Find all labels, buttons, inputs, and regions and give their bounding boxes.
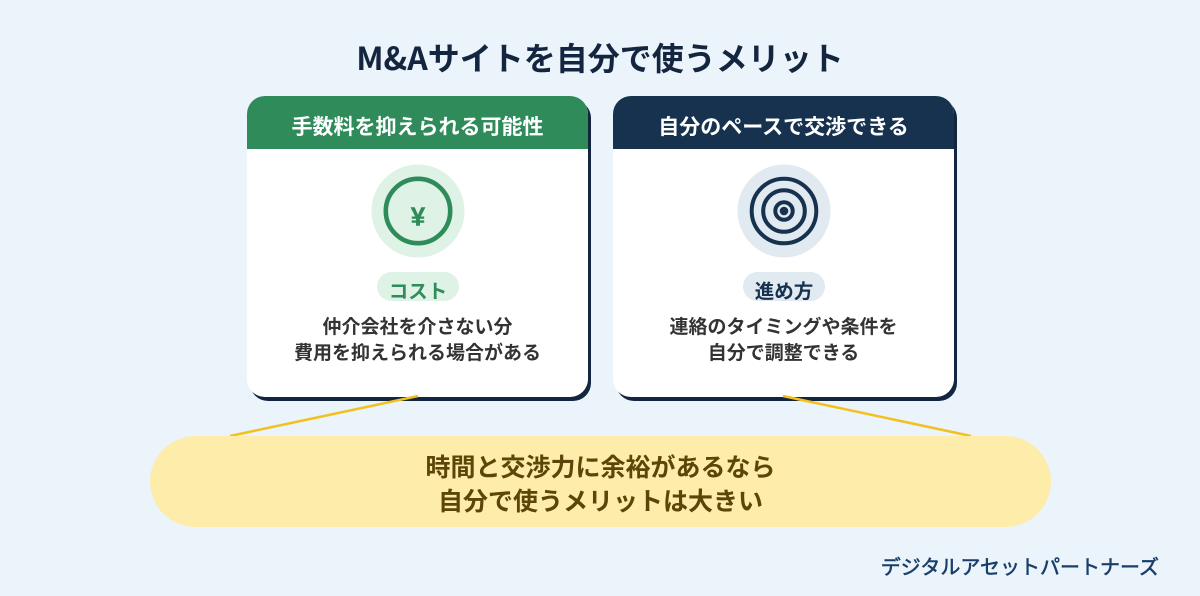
conclusion callout: 時間と交渉力に余裕があるなら: [425, 454, 776, 482]
body text: cost: 仲介会社を介さない分: [322, 317, 512, 338]
icon: target: [738, 164, 830, 258]
panel heading: pace: 自分のペースで交渉できる: [658, 116, 909, 139]
credit: デジタルアセットパートナーズ: [881, 557, 1159, 579]
body text: cost: [294, 316, 541, 364]
panel heading: pace: [613, 96, 954, 149]
panel: cost: [247, 96, 588, 397]
panel heading: cost: 手数料を抑えられる可能性: [292, 116, 544, 139]
conclusion callout: 自分で使うメリットは大きい: [438, 488, 763, 516]
tag: cost: [377, 272, 459, 301]
conclusion callout: [150, 436, 1051, 527]
panel: pace: [613, 96, 954, 397]
panel heading: cost: [247, 96, 588, 149]
body text: pace: 連絡のタイミングや条件を: [669, 317, 898, 338]
body text: pace: 自分で調整できる: [708, 343, 859, 364]
tag: pace: [743, 272, 825, 301]
icon: yen coin: [372, 164, 464, 258]
body text: cost: 費用を抑えられる場合がある: [294, 343, 541, 364]
icon: yen coin: ¥: [410, 201, 425, 231]
title: M&Aサイトを自分で使うメリット: [356, 34, 844, 80]
body text: pace: [669, 316, 898, 364]
